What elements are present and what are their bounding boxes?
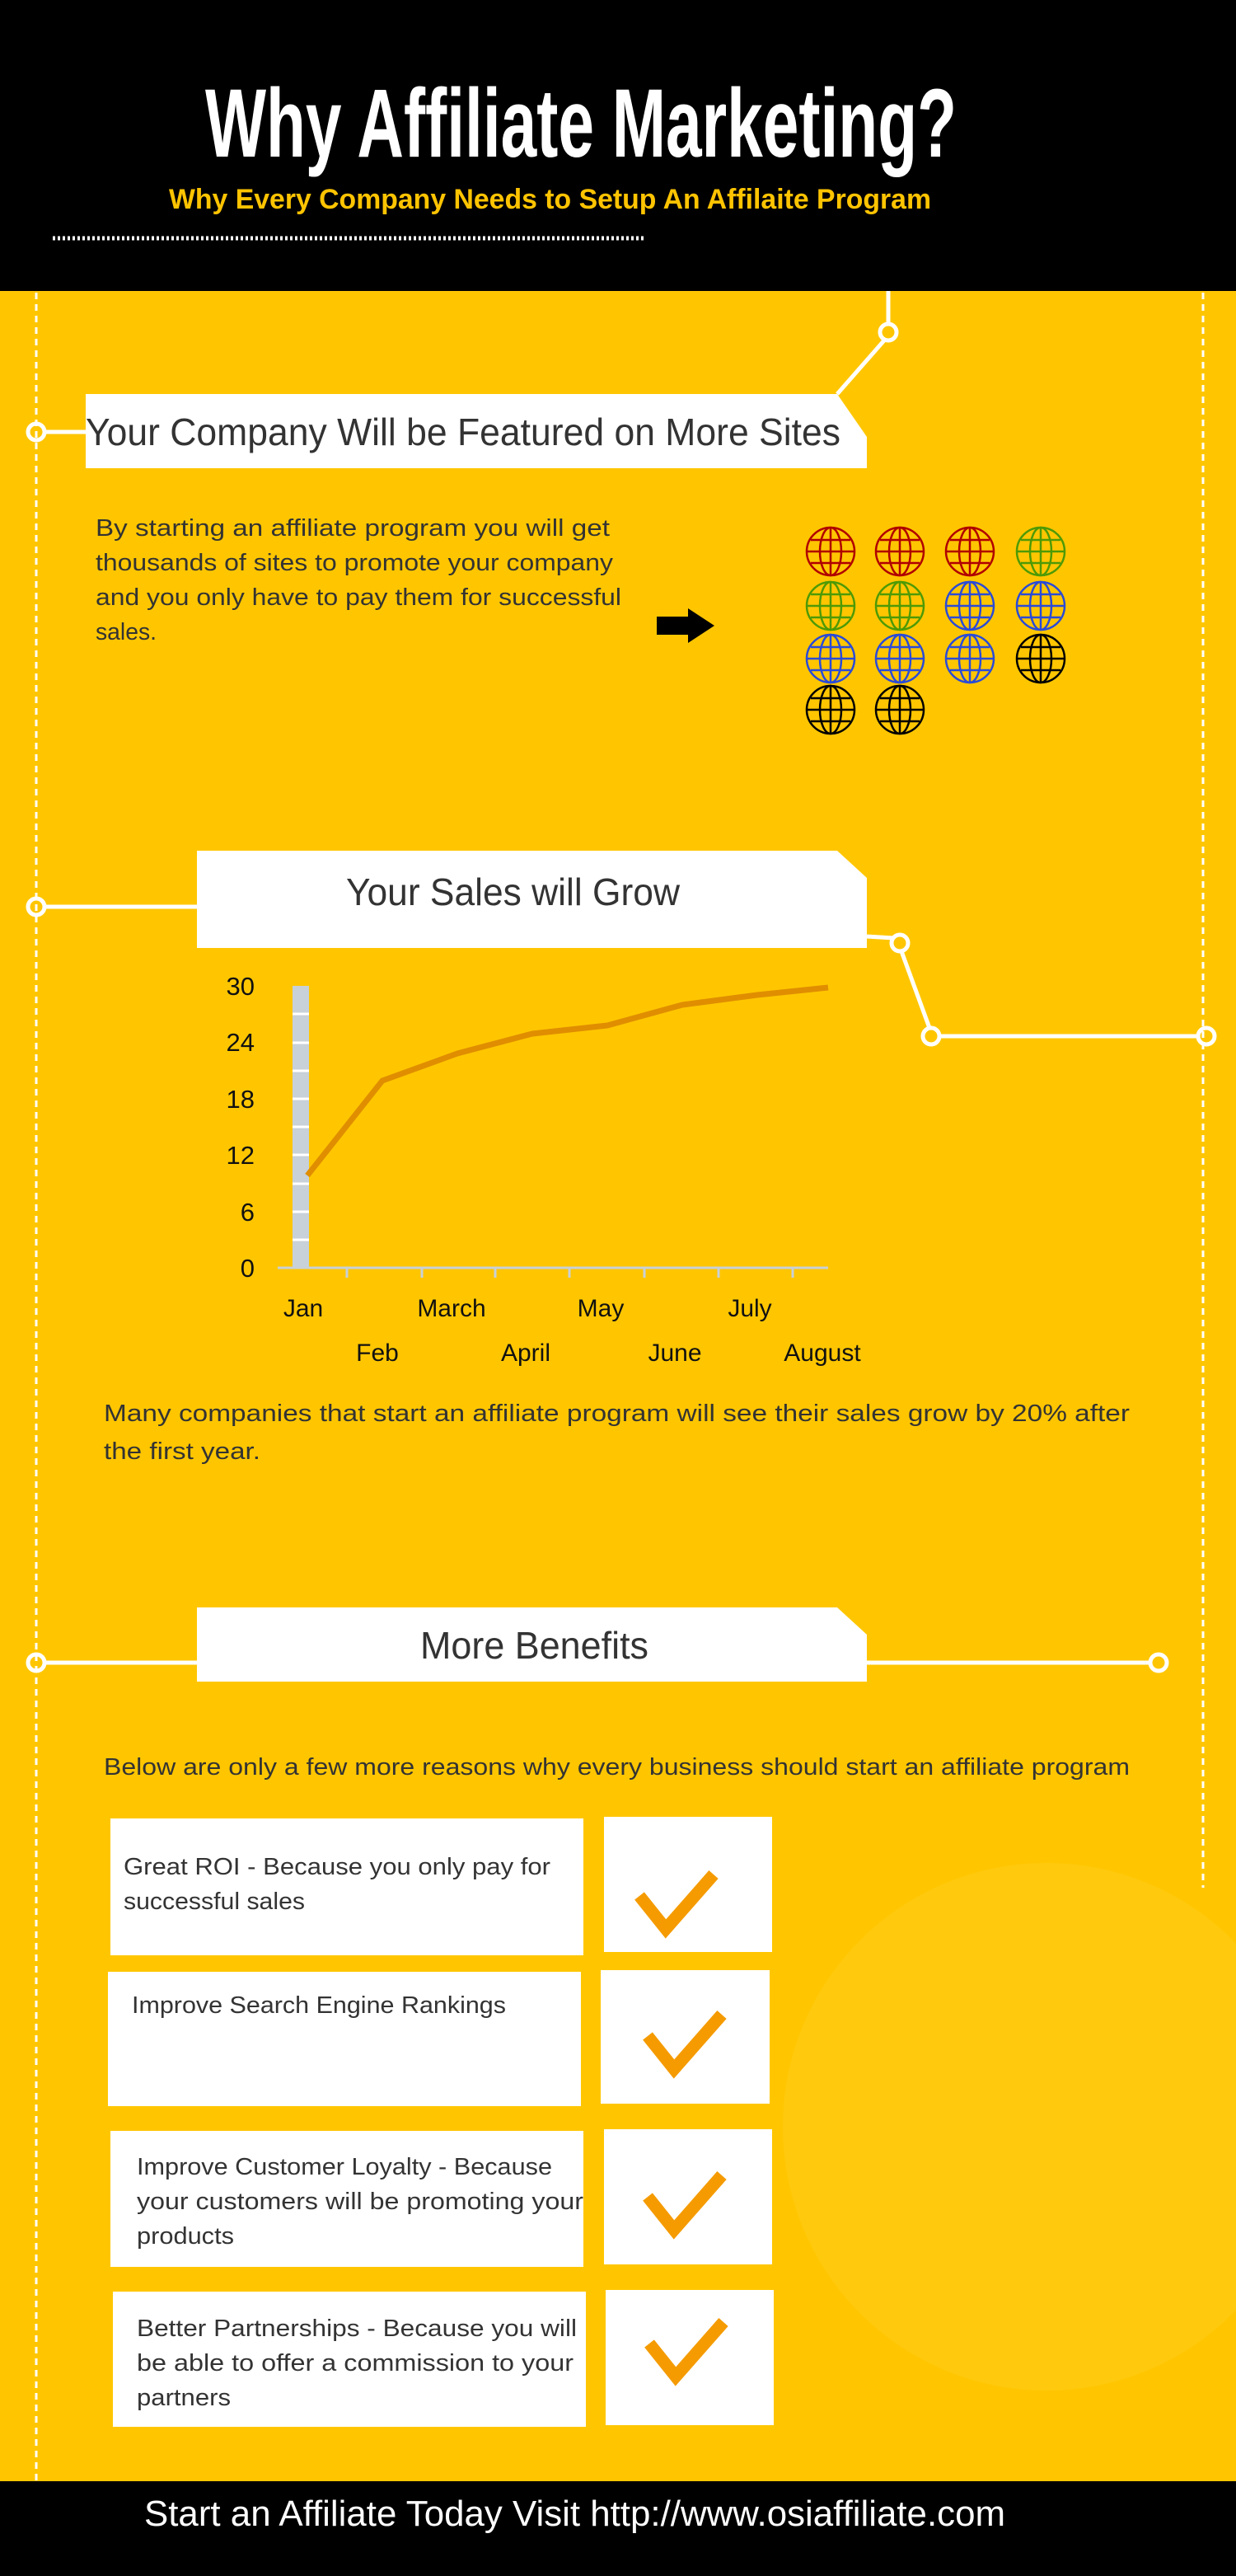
benefit 2: [108, 1970, 770, 2106]
benefit 4: partners: [137, 2385, 231, 2411]
section 2 text: the first year.: [104, 1438, 260, 1465]
side dashed lines: [35, 293, 38, 2481]
section 2 heading: [197, 851, 867, 948]
line chart: May: [578, 1295, 624, 1322]
icon: arrow: [657, 608, 714, 643]
watermark globe: [783, 1863, 1236, 2391]
benefit 1: [110, 1817, 772, 1955]
line chart: August: [784, 1340, 861, 1367]
benefit 4: Better Partnerships - Because you will: [137, 2316, 577, 2342]
connector: section 1: [28, 291, 897, 440]
line chart: Jan: [283, 1295, 323, 1322]
section 2 text: Many companies that start an affiliate program will see their sales grow by 20% after: [104, 1401, 1130, 1427]
line chart: [227, 972, 861, 1367]
section 1 text: and you only have to pay them for successful: [96, 584, 621, 611]
icon: check: [648, 2175, 722, 2230]
footer: [0, 2481, 1236, 2576]
line chart: 12: [227, 1141, 255, 1170]
benefit 4: be able to offer a commission to your: [137, 2350, 574, 2377]
icon: check: [649, 2322, 723, 2377]
line chart: 30: [227, 972, 255, 1001]
connector: section 3: [28, 1654, 1167, 1671]
line chart: Feb: [356, 1340, 399, 1367]
icon grid: globes: [807, 528, 1065, 734]
benefit 4: [113, 2290, 774, 2427]
section 2 text: [104, 1401, 1130, 1465]
subtitle: Why Every Company Needs to Setup An Affilaite Program: [169, 184, 931, 215]
section 3 intro: Below are only a few more reasons why every business should start an affiliate program: [104, 1754, 1130, 1781]
line chart: June: [648, 1340, 702, 1367]
section 3 heading: More Benefits: [420, 1624, 648, 1667]
line chart: 0: [241, 1254, 255, 1283]
section 3 heading: [197, 1607, 867, 1682]
benefit 1: successful sales: [124, 1889, 305, 1915]
section 1 heading: Your Company Will be Featured on More Sites: [86, 411, 840, 453]
line chart: 18: [227, 1085, 255, 1114]
benefit 2: Improve Search Engine Rankings: [132, 1992, 506, 2019]
section 1 text: By starting an affiliate program you will get: [96, 515, 610, 542]
line chart: July: [728, 1295, 772, 1322]
icon: check: [648, 2015, 722, 2069]
section 1 text: [96, 515, 621, 645]
connector: section 2: [28, 899, 1215, 1044]
section 1 text: sales.: [96, 619, 157, 645]
section 1 text: thousands of sites to promote your company: [96, 550, 614, 576]
benefit 1: Great ROI - Because you only pay for: [124, 1854, 550, 1880]
footer: Start an Affiliate Today Visit http://www.osiaffiliate.com: [144, 2494, 1005, 2534]
benefit 3: [110, 2129, 772, 2267]
benefit 3: Improve Customer Loyalty - Because: [137, 2154, 552, 2180]
section 1 heading: [86, 394, 867, 468]
section 2 heading: Your Sales will Grow: [346, 870, 681, 913]
line chart: April: [501, 1340, 550, 1367]
icon: check: [639, 1875, 714, 1929]
line chart: March: [417, 1295, 486, 1322]
line chart: 6: [241, 1198, 255, 1227]
benefit 3: products: [137, 2223, 234, 2250]
benefit 3: your customers will be promoting your: [137, 2189, 583, 2215]
header: [0, 0, 1236, 291]
line chart: 24: [227, 1028, 255, 1057]
